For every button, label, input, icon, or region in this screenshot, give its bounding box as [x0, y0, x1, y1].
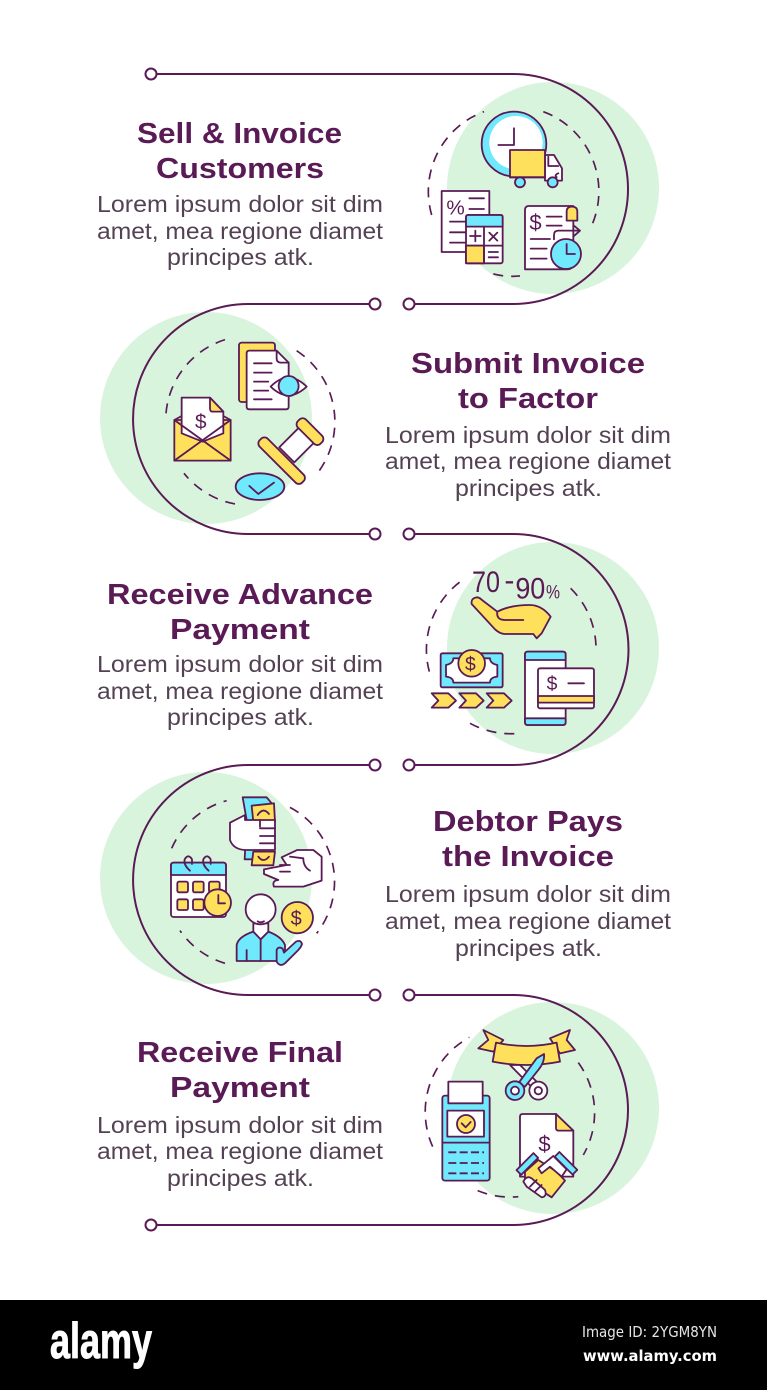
node 4 end: [370, 990, 380, 1000]
green circle 4: [100, 772, 312, 984]
heading 3: Receive Advance: [107, 579, 373, 611]
start node: [146, 68, 156, 80]
node 5 start: [404, 990, 414, 1000]
text block 4: Lorem ipsum dolor sit dim: [385, 881, 671, 907]
heading 5: Receive Final: [137, 1037, 343, 1069]
icons 3: [426, 564, 596, 734]
node 2 start: [370, 298, 380, 310]
text block 5: principes atk.: [167, 1165, 314, 1191]
text block 4: amet, mea regione diamet: [385, 908, 672, 934]
text block 3: Lorem ipsum dolor sit dim: [97, 651, 383, 677]
node 3 start: [404, 528, 414, 540]
icons 4: $: [291, 908, 302, 930]
image id: Image ID: 2YGM8YN: [582, 1323, 717, 1341]
icons 3: -: [504, 564, 514, 597]
heading 4: [433, 806, 623, 873]
text block 5: amet, mea regione diamet: [97, 1138, 384, 1164]
text block 2: [385, 422, 672, 501]
connector line 4: [133, 765, 369, 995]
panel: step 1 sell and invoice: [97, 68, 659, 310]
node 4 start: [370, 760, 380, 770]
text block 3: [97, 651, 384, 730]
heading 5: Payment: [170, 1072, 310, 1104]
node 2 end: [370, 528, 380, 540]
heading 1: Sell & Invoice: [137, 118, 342, 150]
text block 3: amet, mea regione diamet: [97, 678, 384, 704]
text block 2: Lorem ipsum dolor sit dim: [385, 422, 671, 448]
text block 5: [97, 1112, 384, 1191]
text block 2: amet, mea regione diamet: [385, 448, 672, 474]
heading 4: the Invoice: [442, 841, 614, 873]
text block 4: [385, 881, 672, 961]
connector line 5: [157, 995, 628, 1225]
icons 5: [425, 1030, 595, 1197]
heading 2: to Factor: [458, 383, 598, 415]
connector line 1: [157, 74, 628, 304]
node 3 end: [404, 760, 414, 770]
panel: step 2 submit invoice: [100, 298, 672, 540]
heading 4: Debtor Pays: [433, 806, 623, 838]
green circle 1: [447, 82, 659, 294]
icons 1: %: [446, 196, 465, 219]
heading 2: [411, 348, 645, 415]
icons 3: 70: [472, 566, 500, 599]
icons 2: $: [195, 410, 207, 433]
text block 1: Lorem ipsum dolor sit dim: [97, 191, 383, 217]
end node: [146, 1220, 156, 1230]
heading 1: [137, 118, 342, 185]
icons 1: [428, 112, 599, 276]
heading 3: [107, 579, 373, 646]
alamy logo: alamy: [50, 1313, 152, 1369]
text block 1: [97, 191, 384, 270]
icons 1: $: [529, 210, 542, 235]
heading 1: Customers: [156, 153, 324, 185]
heading 5: [137, 1037, 343, 1104]
green circle 2: [100, 312, 312, 524]
panel: step 4 debtor pays: [100, 760, 672, 1000]
connector line 3: [415, 534, 628, 765]
panel: step 5 receive final: [97, 990, 659, 1230]
footer bar: [0, 1300, 767, 1390]
icons 2: [166, 339, 335, 504]
heading 3: Payment: [170, 614, 310, 646]
green circle 5: [447, 1002, 659, 1214]
green circle 3: [447, 542, 659, 754]
icons 3: %: [546, 582, 560, 603]
icons 3: $: [547, 674, 558, 695]
text block 5: Lorem ipsum dolor sit dim: [97, 1112, 383, 1138]
heading 2: Submit Invoice: [411, 348, 645, 380]
icons 3: $: [465, 655, 476, 676]
text block 3: principes atk.: [167, 704, 314, 730]
node 1 end: [404, 298, 414, 310]
icons 3: 90: [515, 572, 545, 605]
website: www.alamy.com: [583, 1347, 717, 1365]
icons 4: [171, 797, 335, 965]
panel: step 3 receive advance: [97, 528, 659, 770]
text block 1: principes atk.: [167, 244, 314, 270]
text block 1: amet, mea regione diamet: [97, 218, 384, 244]
text block 4: principes atk.: [455, 935, 602, 961]
icons 5: $: [538, 1131, 551, 1156]
text block 2: principes atk.: [455, 475, 602, 501]
connector line 2: [133, 304, 369, 534]
